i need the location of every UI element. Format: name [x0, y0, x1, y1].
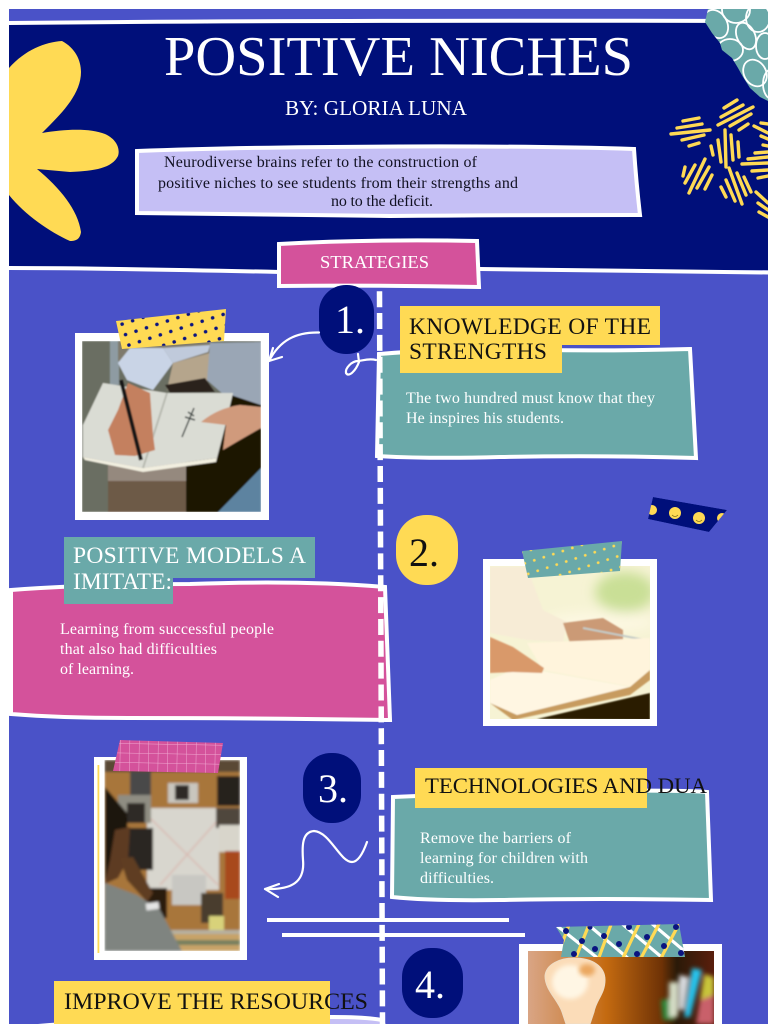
- badge 2: [396, 515, 458, 585]
- badge 4: 4.: [415, 962, 445, 1007]
- heading: positive models: POSITIVE MODELS A: [73, 543, 306, 569]
- heading: technologies and DUA: [415, 768, 708, 808]
- panel: technologies and DUA: [392, 791, 711, 900]
- arrow: squiggle to photo 3: [265, 831, 367, 897]
- tape: yellow with navy dots: [116, 309, 226, 349]
- heading: knowledge of the strengths: STRENGTHS: [409, 339, 547, 365]
- panel: knowledge of the strengths: [377, 349, 696, 458]
- heading: improve the resources: IMPROVE THE RESOURCES: [64, 989, 368, 1015]
- torn teal circle decoration: [705, 9, 768, 101]
- card text: Remove the barriers of: [420, 830, 572, 847]
- card text: The two hundred must know that they: [406, 390, 655, 407]
- icon: yellow flower: [9, 41, 119, 241]
- intro text: positive niches to see students from their strengths and: [158, 175, 518, 192]
- intro text: no to the deficit.: [331, 193, 433, 210]
- heading: positive models: [64, 537, 315, 604]
- heading: technologies and DUA: TECHNOLOGIES AND DUA: [425, 773, 708, 798]
- badge 2: 2.: [409, 530, 439, 575]
- card text: learning for children with: [420, 850, 588, 867]
- horizontal divider lines: [267, 918, 525, 937]
- panel: positive models: [11, 583, 390, 720]
- card text: of learning.: [60, 661, 134, 678]
- photo 3: person looking at evidence board: [94, 757, 247, 960]
- card text: He inspires his students.: [406, 410, 564, 427]
- photo 4: light bulb: [519, 944, 722, 1024]
- heading: knowledge of the strengths: KNOWLEDGE OF THE: [409, 314, 651, 340]
- photo 1: hands writing in notebook: [75, 333, 269, 520]
- strategies label: STRATEGIES: [320, 252, 429, 272]
- intro text: [158, 154, 518, 210]
- arrow: badge 1 to photo 1: [269, 332, 319, 361]
- yellow hatch marks decoration: [671, 100, 768, 217]
- author byline: BY: GLORIA LUNA: [285, 96, 468, 120]
- photo 2: person reading open book: [483, 559, 657, 726]
- badge 4: [402, 948, 463, 1018]
- card text: [406, 390, 655, 427]
- badge 3: [303, 753, 361, 823]
- tape: navy with smileys: [647, 497, 727, 532]
- loop connector to card 1: [346, 354, 376, 375]
- tape: teal with yellow dots: [522, 541, 622, 578]
- badge 3: 3.: [318, 766, 348, 811]
- tape: teal plaid: [556, 924, 685, 957]
- card text: [60, 621, 274, 678]
- dashed timeline: [380, 291, 382, 1024]
- heading: knowledge of the strengths: [400, 306, 660, 373]
- strategies label: [279, 240, 479, 287]
- tape: pink grid: [113, 740, 223, 773]
- intro panel: [137, 146, 640, 216]
- heading: improve the resources: [54, 981, 368, 1024]
- heading: positive models: IMITATE:: [73, 569, 172, 595]
- intro text: Neurodiverse brains refer to the construction of: [164, 154, 478, 171]
- card text: [420, 830, 588, 887]
- card text: that also had difficulties: [60, 641, 217, 658]
- panel: improve the resources: [38, 1017, 384, 1024]
- card text: Learning from successful people: [60, 621, 274, 638]
- badge 1: 1.: [335, 297, 365, 342]
- badge 1: [319, 285, 374, 354]
- title: POSITIVE NICHES: [164, 26, 633, 88]
- header band: [9, 21, 768, 272]
- card text: difficulties.: [420, 870, 494, 887]
